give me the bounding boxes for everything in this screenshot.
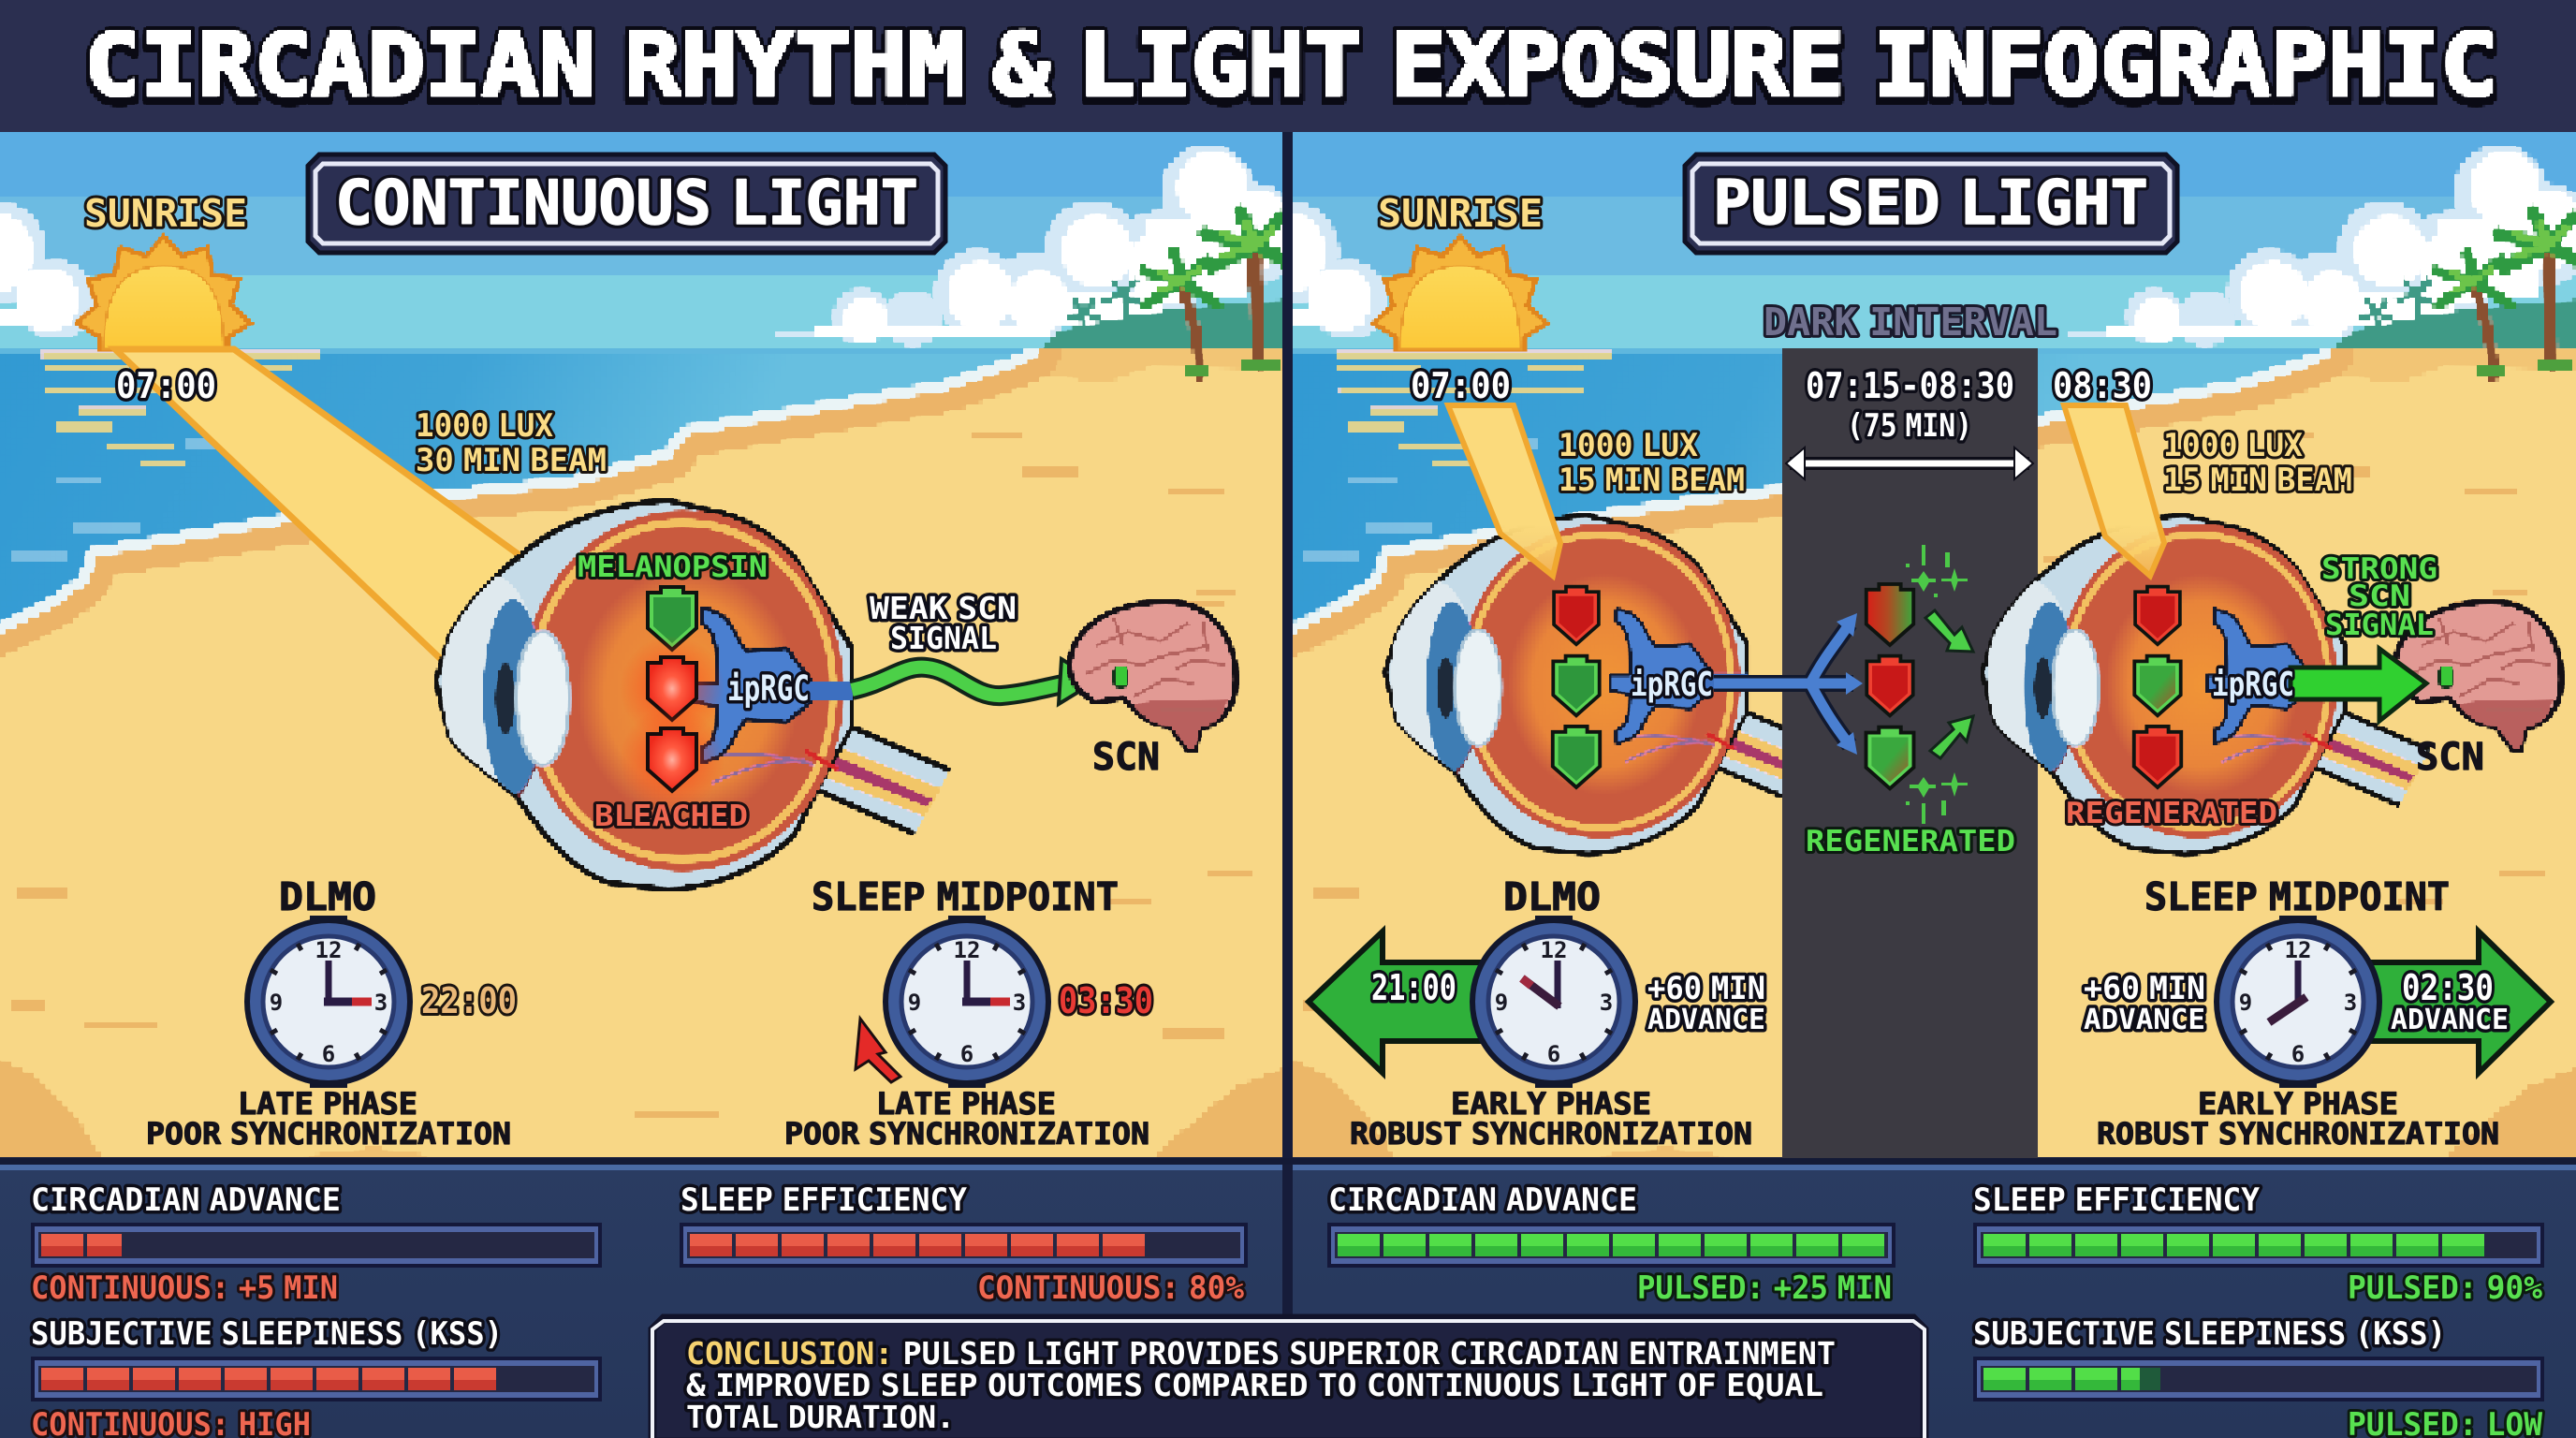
DLMO block: +60 MIN (1647, 970, 1765, 1007)
clock 02:30: 6 (2291, 1041, 2305, 1067)
regenerated green label: REGENERATED (1806, 825, 2015, 858)
clock 21:00: 12 (1541, 937, 1567, 963)
conclusion callout (652, 1318, 1925, 1438)
clock 22:00: 3 (374, 990, 388, 1016)
panel heading: CONTINUOUS LIGHT (335, 169, 918, 239)
panel: metrics footer (0, 1158, 2576, 1438)
metric: continuous circadian advance (31, 1181, 600, 1307)
DLMO block (1309, 874, 1765, 1152)
beam dose label second: 1000 LUX (2163, 427, 2304, 464)
dark interval label: DARK INTERVAL (1764, 300, 2057, 345)
metric: pulsed sleep efficiency (1973, 1181, 2543, 1307)
clock 03:30: 3 (1013, 990, 1026, 1016)
bleached label: BLEACHED (594, 800, 748, 833)
sleep midpoint block: POOR SYNCHRONIZATION (784, 1116, 1149, 1152)
clock 22:00: 12 (315, 937, 342, 963)
metric: continuous circadian advance: CIRCADIAN ADVANCE (31, 1181, 341, 1219)
interval time: 07:15-08:30 (1806, 365, 2014, 406)
shields second eye (2134, 587, 2181, 787)
sleep midpoint block: ADVANCE (2084, 1004, 2205, 1036)
beam dose label: 30 MIN BEAM (416, 442, 607, 479)
red arrow (856, 1019, 900, 1082)
beam dose label first: 15 MIN BEAM (1559, 462, 1745, 499)
DLMO block: 22:00 (421, 980, 517, 1021)
weak signal label (870, 590, 1017, 656)
time 07:00: 07:00 (116, 365, 216, 406)
clock 21:00: 9 (1495, 990, 1508, 1016)
eye diagram (436, 501, 949, 889)
sunrise label: SUNRISE (1378, 191, 1543, 236)
metric: continuous sleepiness: SUBJECTIVE SLEEPINESS (KSS) (31, 1315, 503, 1353)
title bar (0, 0, 2576, 132)
eye diagram second pulse (1983, 516, 2429, 854)
clock 03:30: 6 (960, 1041, 973, 1067)
DLMO block: ADVANCE (1647, 1004, 1765, 1036)
beam dose label first (1559, 427, 1745, 499)
SCN label: SCN (1092, 736, 1160, 779)
panel heading: PULSED LIGHT (1713, 169, 2148, 239)
title: CIRCADIAN RHYTHM & LIGHT EXPOSURE INFOGRAPHIC (84, 20, 2497, 121)
clock 21:00: 6 (1547, 1041, 1560, 1067)
icon: sunrise sun (78, 237, 250, 348)
beam first pulse (1448, 405, 1560, 576)
light beam (115, 349, 526, 660)
SCN label: SCN (2416, 736, 2484, 779)
strong signal label: SIGNAL (2325, 609, 2434, 642)
strong signal arrow (2291, 649, 2426, 721)
DLMO block: DLMO (279, 874, 376, 919)
DLMO block: LATE PHASE (238, 1086, 417, 1122)
ipRGC first label: ipRGC (1631, 666, 1713, 704)
sleep midpoint block (784, 874, 1153, 1152)
regenerated red label: REGENERATED (2066, 797, 2277, 830)
clock 21:00: 3 (1600, 990, 1613, 1016)
panel: continuous light (78, 154, 1236, 1152)
sleep midpoint block: ROBUST SYNCHRONIZATION (2097, 1116, 2499, 1152)
metric: continuous sleep efficiency: CONTINUOUS: 80% (977, 1269, 1244, 1307)
clock 22:00: 9 (270, 990, 283, 1016)
sleep midpoint block: +60 MIN (2084, 970, 2205, 1007)
beam dose label first: 1000 LUX (1559, 427, 1699, 464)
beam dose label (416, 407, 607, 479)
eye diagram first pulse (1385, 516, 1832, 854)
strong signal label (2321, 552, 2437, 642)
green arrow down (1930, 716, 1973, 758)
blue branching signal (1714, 613, 1863, 755)
clock 22:00 (247, 916, 410, 1088)
DLMO block: DLMO (1503, 874, 1601, 919)
double arrow (1786, 448, 2033, 479)
green arrow up (1925, 610, 1973, 652)
melanopsin label: MELANOPSIN (578, 550, 768, 584)
DLMO block: ROBUST SYNCHRONIZATION (1350, 1116, 1752, 1152)
panel heading: PULSED LIGHT (1713, 169, 2148, 239)
shields first eye (1553, 587, 1600, 787)
beam second pulse (2064, 405, 2164, 576)
icon: brain (1070, 602, 1236, 751)
title: CIRCADIAN RHYTHM & LIGHT EXPOSURE INFOGRAPHIC (84, 14, 2497, 115)
panel heading: CONTINUOUS LIGHT (335, 169, 918, 239)
strong signal label: STRONG (2321, 552, 2437, 586)
sleep midpoint block: LATE PHASE (876, 1086, 1056, 1122)
clock 03:30 (886, 916, 1048, 1088)
panel heading (1685, 154, 2177, 253)
panel heading (308, 154, 945, 253)
green arrow earlier (2359, 932, 2551, 1073)
conclusion callout: TOTAL DURATION. (686, 1399, 955, 1435)
metric: pulsed sleepiness (1973, 1315, 2543, 1438)
weak signal label: WEAK SCN (870, 590, 1017, 626)
clock 22:00: 6 (322, 1041, 335, 1067)
conclusion callout: & IMPROVED SLEEP OUTCOMES COMPARED TO CONTINUOUS LIGHT OF EQUAL (686, 1367, 1823, 1403)
metric: pulsed sleepiness: SUBJECTIVE SLEEPINESS (KSS) (1973, 1315, 2446, 1353)
strong signal label: SCN (2349, 580, 2410, 613)
sleep midpoint block: 03:30 (1059, 980, 1153, 1021)
clock 03:30: 12 (954, 937, 980, 963)
icon: brain (2395, 602, 2561, 751)
metric: continuous sleep efficiency: SLEEP EFFICIENCY (681, 1181, 967, 1219)
metric: continuous sleep efficiency (681, 1181, 1246, 1307)
sunrise label: SUNRISE (84, 191, 247, 236)
shields during dark interval (1866, 584, 1913, 788)
metric: pulsed circadian advance: PULSED: +25 MIN (1637, 1269, 1892, 1307)
sleep midpoint block: ADVANCE (2391, 1004, 2509, 1036)
clock 02:30: 3 (2344, 990, 2357, 1016)
clock 21:00 (1472, 916, 1635, 1088)
interval time: (75 MIN) (1847, 407, 1972, 445)
metric: pulsed circadian advance: CIRCADIAN ADVANCE (1328, 1181, 1637, 1219)
DLMO block: POOR SYNCHRONIZATION (146, 1116, 511, 1152)
clock 03:30: 9 (908, 990, 921, 1016)
weak signal label: SIGNAL (890, 620, 997, 656)
sleep midpoint block: SLEEP MIDPOINT (812, 874, 1119, 919)
DLMO block: EARLY PHASE (1451, 1086, 1651, 1122)
beam dose label: 1000 LUX (416, 407, 554, 445)
sleep midpoint block: 02:30 (2402, 967, 2494, 1008)
beach backgrounds (0, 132, 2576, 1159)
DLMO block: 21:00 (1371, 967, 1456, 1008)
time 07:00: 07:00 (1411, 365, 1511, 406)
DLMO block (146, 874, 517, 1152)
metric: pulsed sleep efficiency: SLEEP EFFICIENCY (1973, 1181, 2260, 1219)
clock 02:30: 12 (2285, 937, 2311, 963)
beam dose label second (2163, 427, 2352, 499)
time 08:30: 08:30 (2053, 365, 2152, 406)
conclusion callout: CONCLUSION: PULSED LIGHT PROVIDES SUPERIOR CIRCADIAN ENTRAINMENT (686, 1335, 1836, 1372)
dark interval column (1782, 348, 2038, 1159)
clock 02:30 (2217, 916, 2379, 1088)
sleep midpoint block: EARLY PHASE (2198, 1086, 2398, 1122)
sleep midpoint block (2084, 874, 2551, 1152)
sleep midpoint block: SLEEP MIDPOINT (2144, 874, 2450, 919)
melanopsin shields (620, 587, 724, 812)
ipRGC second label: ipRGC (2212, 666, 2294, 704)
panel: pulsed light (1309, 154, 2561, 1159)
regeneration sparkles (1906, 545, 1968, 824)
metric: pulsed sleep efficiency: PULSED: 90% (2348, 1269, 2543, 1307)
clock 02:30: 9 (2239, 990, 2252, 1016)
ipRGC label: ipRGC (727, 668, 810, 709)
icon: sunrise sun (1374, 237, 1546, 348)
beam dose label second: 15 MIN BEAM (2163, 462, 2352, 499)
metric: continuous circadian advance: CONTINUOUS: +5 MIN (31, 1269, 338, 1307)
title: CIRCADIAN RHYTHM & LIGHT EXPOSURE INFOGRAPHIC (84, 14, 2497, 115)
metric: pulsed circadian advance (1328, 1181, 1894, 1307)
weak signal arrow (852, 659, 1097, 704)
green arrow earlier (1309, 932, 1498, 1073)
metric: continuous sleepiness (31, 1315, 600, 1438)
interval time (1806, 365, 2014, 445)
